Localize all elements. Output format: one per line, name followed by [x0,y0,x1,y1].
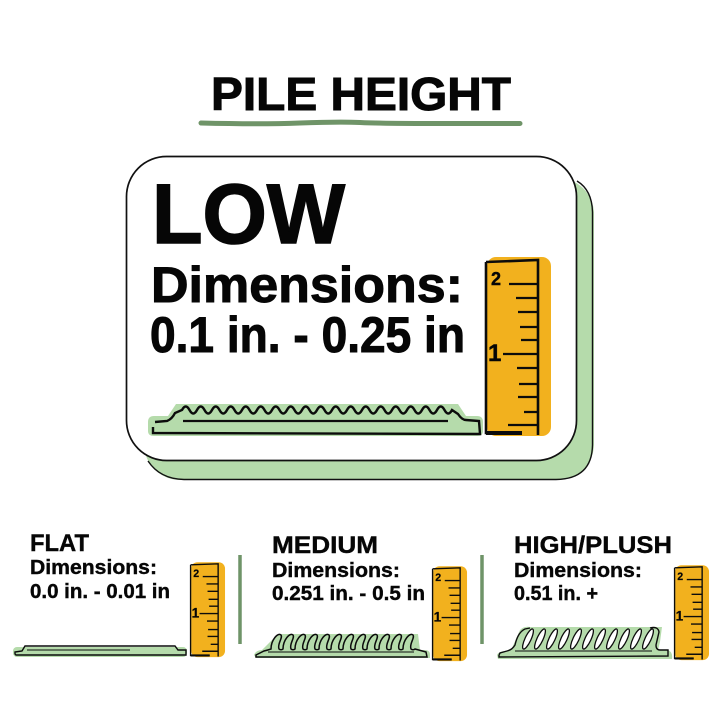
text: flat range: 0.0 in. - 0.01 in [30,580,170,603]
panel: high/plush [497,532,709,660]
icon: ruler: 2 [491,269,501,289]
icon: medium carpet [254,634,430,658]
icon: medium ruler: 2 [435,572,441,584]
text: medium dimensions: Dimensions: [272,559,400,582]
card green shadow [144,178,594,480]
panel: low pile height [126,156,594,480]
icon: ruler: 1 [488,340,501,367]
card [126,156,576,460]
heading: high/plush: HIGH/PLUSH [514,532,672,559]
icon: medium ruler [433,566,467,661]
icon: ruler [486,257,551,436]
heading: flat: FLAT [30,530,89,557]
text: flat dimensions: Dimensions: [30,556,157,579]
icon: flat carpet [13,646,187,657]
title underline [201,122,520,124]
heading: low: LOW [152,167,346,261]
icon: low carpet [148,404,483,436]
panel: flat [13,530,225,657]
text: high range: 0.51 in. + [514,582,598,605]
divider [238,555,242,644]
icon: high ruler [675,565,709,660]
text: low range: 0.1 in. - 0.25 in [150,307,465,363]
title: PILE HEIGHT [211,68,511,120]
text: dimensions: Dimensions: [151,257,463,313]
text: medium range: 0.251 in. - 0.5 in [272,582,425,605]
icon: high ruler: 2 [677,571,683,583]
heading: medium: MEDIUM [272,532,378,559]
panel: medium [254,532,467,661]
icon: high ruler: 1 [676,608,684,623]
icon: high carpet [497,627,672,659]
icon: flat ruler: 1 [192,605,200,620]
divider [480,555,484,644]
text: high dimensions: Dimensions: [514,559,642,582]
icon: flat ruler: 2 [193,568,199,580]
icon: medium ruler: 1 [434,609,442,624]
icon: flat ruler [191,562,225,657]
tufts [521,628,655,650]
